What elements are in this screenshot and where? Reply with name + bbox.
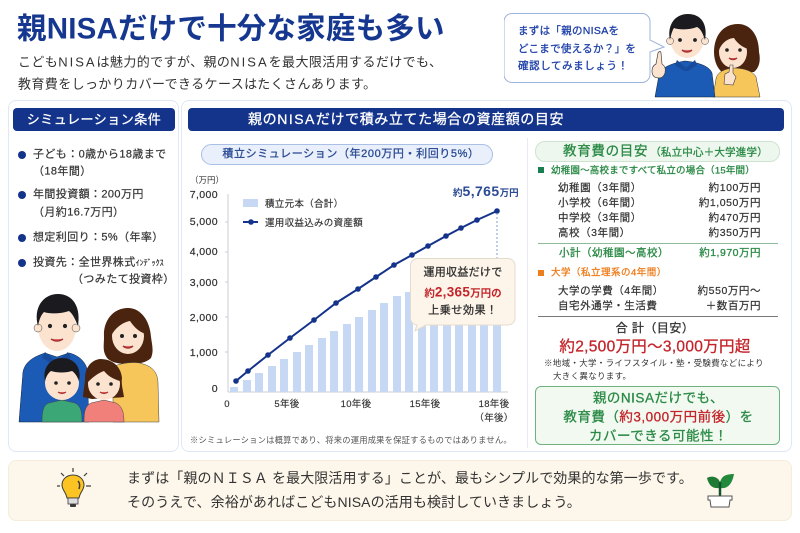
callout: investment gain: [410, 258, 516, 332]
section: private schools: 約1,050万円: [699, 197, 761, 209]
conditions list: 想定利回り：5%（年率）: [33, 232, 164, 244]
heading: education cost: [535, 141, 780, 162]
chart footnote: ※シミュレーションは概算であり、将来の運用成果を保証するものではありません。: [190, 435, 512, 445]
x axis labels: 5年後: [274, 398, 300, 410]
subtotal: 約1,970万円: [699, 247, 761, 259]
y axis labels: 0: [212, 383, 218, 395]
chart subtitle pill: [201, 144, 493, 165]
x axis labels: 18年後: [479, 398, 510, 410]
title: 親NISAだけで十分な家庭も多い: [17, 12, 445, 45]
section: university: 自宅外通学・生活費: [558, 300, 657, 312]
section: private schools: 幼稚園～高校まですべて私立の場合（15年間）: [551, 165, 755, 176]
conditions list: [18, 148, 175, 286]
total: [559, 321, 751, 355]
chart subtitle pill: 積立シミュレーション（年200万円・利回り5%）: [222, 148, 480, 160]
y axis labels: [190, 189, 218, 395]
section: university: 約550万円～: [698, 285, 761, 297]
y axis labels: 3,000: [190, 277, 218, 289]
heading: simulation conditions: [13, 108, 175, 131]
subtotal: [559, 246, 761, 259]
y axis labels: 1,000: [190, 347, 218, 359]
y axis labels: 7,000: [190, 189, 218, 201]
icon: light bulb: [57, 468, 91, 507]
conditions list: （つみたて投資枠）: [72, 274, 175, 286]
callout: conclusion: 親のNISAだけでも、: [593, 390, 724, 405]
y axis labels: 4,000: [190, 246, 218, 258]
heading: main: [188, 108, 784, 131]
section: private schools: 中学校（3年間）: [558, 212, 642, 224]
callout: conclusion: 教育費（約3,000万円前後）を: [563, 409, 754, 424]
conditions list: （18年間）: [33, 166, 92, 178]
bar and line chart: [190, 175, 514, 424]
bars: principal: [230, 292, 501, 392]
speech bubble: どこまで使えるか？」を: [518, 43, 636, 55]
note: ※地域・大学・ライフスタイル・塾・受験費などにより: [544, 358, 764, 368]
section: university: 大学の学費（4年間）: [558, 285, 664, 297]
conditions list: （月約16.7万円）: [33, 206, 124, 218]
icon: plant: [707, 474, 734, 508]
total: 合 計（目安）: [616, 321, 694, 335]
speech bubble: [504, 13, 666, 83]
total: 約2,500万円～3,000万円超: [559, 338, 751, 355]
panel: footer message: [8, 460, 792, 521]
note: 大きく異なります。: [553, 371, 631, 381]
x axis labels: [224, 398, 514, 424]
footer text: [127, 470, 693, 510]
intro text: こどもNISAは魅力的ですが、親のNISAを最大限活用するだけでも、: [18, 54, 442, 70]
intro text: [18, 54, 442, 92]
section: private schools: 約470万円: [709, 212, 761, 224]
x axis labels: 15年後: [410, 398, 441, 410]
line: total assets: [233, 208, 500, 384]
section: private schools: 小学校（6年間）: [558, 197, 642, 209]
callout: investment gain: 約2,365万円の: [424, 284, 502, 299]
x axis labels: 0: [224, 399, 230, 410]
section: university: 大学（私立理系の4年間）: [551, 267, 667, 278]
x axis labels: 10年後: [341, 398, 372, 410]
heading: simulation conditions: シミュレーション条件: [27, 112, 161, 127]
footer text: まずは「親のＮＩＳＡ を最大限活用する」ことが、最もシンプルで効果的な第一歩です。: [127, 470, 693, 486]
conditions list: 年間投資額：200万円: [33, 188, 144, 200]
final value label: 約5,765万円: [453, 183, 519, 199]
callout: investment gain: 運用収益だけで: [423, 266, 503, 278]
section: private schools: [538, 164, 761, 239]
note: [544, 358, 764, 381]
heading text: 教育費の目安（私立中心＋大学進学）: [563, 143, 768, 158]
callout: conclusion: カバーできる可能性！: [589, 428, 728, 443]
x axis labels: （年後）: [474, 412, 514, 424]
legend: [243, 198, 363, 229]
callout: investment gain: 上乗せ効果！: [428, 304, 498, 316]
intro text: 教育費をしっかりカバーできるケースはたくさんあります。: [18, 76, 377, 92]
section: private schools: 幼稚園（3年間）: [558, 182, 642, 194]
panel: simulation conditions: [8, 100, 179, 452]
subtotal: 小計（幼稚園～高校）: [559, 247, 669, 259]
section: private schools: 約100万円: [709, 182, 761, 194]
panel: education cost: [527, 138, 785, 448]
conditions list: 子ども：0歳から18歳まで: [33, 148, 167, 160]
speech bubble: まずは「親のNISAを: [518, 25, 619, 37]
heading: main: 親のNISAだけで積み立てた場合の資産額の目安: [248, 111, 564, 127]
footer text: そのうえで、余裕があればこどもNISAの活用も検討していきましょう。: [127, 494, 581, 510]
section: private schools: 約350万円: [709, 227, 761, 239]
panel: main: [181, 100, 792, 452]
y axis labels: 5,000: [190, 216, 218, 228]
section: university: [538, 266, 761, 312]
legend: 積立元本（合計）: [265, 198, 343, 210]
y axis labels: 2,000: [190, 312, 218, 324]
speech bubble: 確認してみましょう！: [518, 60, 629, 72]
illustration: family: [18, 294, 160, 422]
section: university: ＋数百万円: [706, 300, 761, 312]
callout: conclusion: [535, 386, 780, 445]
conditions list: 投資先：全世界株式ｲﾝﾃﾞｯｸｽ: [33, 256, 164, 268]
bar and line chart: （万円）: [190, 175, 224, 185]
legend: 運用収益込みの資産額: [265, 217, 363, 229]
section: private schools: 高校（3年間）: [558, 227, 631, 239]
illustration: parents pointing: [652, 14, 760, 98]
